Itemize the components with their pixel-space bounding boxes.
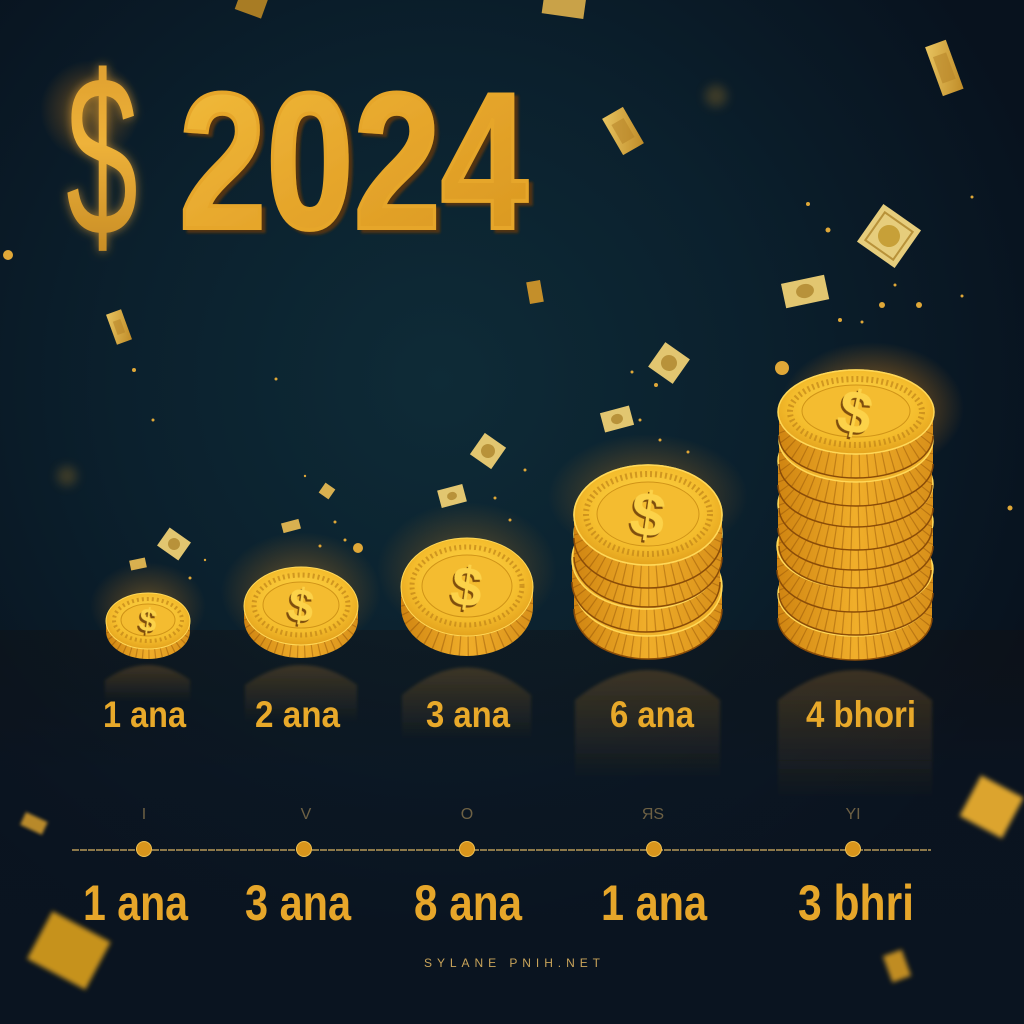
coin stack 5	[777, 342, 964, 660]
timeline tick marks: YI	[845, 806, 861, 823]
lower labels: 3 bhri	[798, 875, 914, 931]
timeline tick marks: O	[461, 806, 473, 823]
footer: SYLANE PNIH.NET	[424, 956, 601, 970]
reflective floor	[0, 630, 1024, 1024]
coin stack 2: $	[285, 577, 317, 633]
coin stack 4: $	[626, 479, 670, 552]
year: 2024	[179, 53, 528, 270]
coin stack 2	[228, 537, 374, 658]
coin stack 1: $	[137, 601, 160, 639]
timeline tick marks	[142, 806, 861, 823]
timeline tick marks: V	[301, 806, 312, 823]
upper labels: 1 ana	[103, 694, 186, 735]
coin stack 5: $	[832, 376, 878, 449]
particles	[3, 196, 1012, 580]
lower labels: 8 ana	[414, 875, 523, 931]
upper labels: 6 ana	[610, 694, 694, 735]
lower labels: 3 ana	[245, 875, 352, 931]
timeline	[72, 842, 931, 856]
coin stack 1	[96, 566, 200, 659]
reflections under stacks	[105, 665, 932, 800]
upper labels	[103, 694, 916, 735]
dollar sign: $	[66, 28, 138, 284]
lower labels: 1 ana	[601, 875, 708, 931]
timeline tick marks: ЯS	[642, 806, 664, 823]
lower labels	[83, 875, 914, 931]
upper labels: 2 ana	[255, 694, 340, 735]
timeline tick marks: I	[142, 806, 146, 823]
coin stack 3	[386, 508, 548, 656]
coin stack 3: $	[447, 553, 487, 620]
upper labels: 4 bhori	[806, 694, 916, 735]
lower labels: 1 ana	[83, 875, 189, 931]
title: $ 2024	[40, 28, 528, 284]
blurred bokeh	[57, 85, 727, 486]
coin stack 4	[548, 434, 748, 659]
upper labels: 3 ana	[426, 694, 510, 735]
